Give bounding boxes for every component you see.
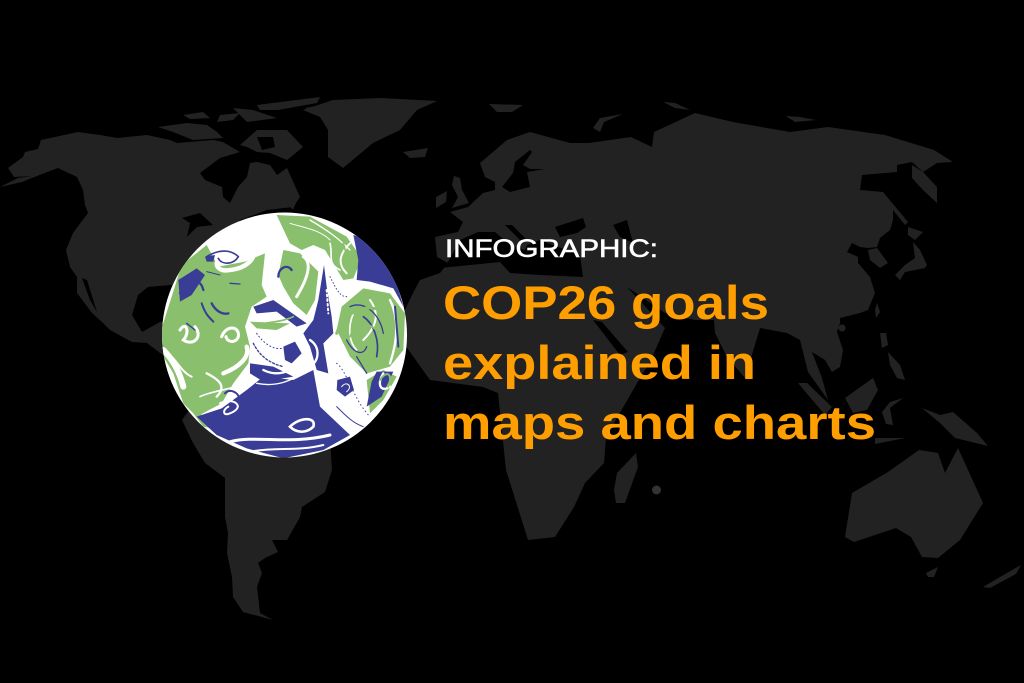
title [443, 276, 876, 449]
Indonesia and New Guinea [798, 383, 832, 415]
Canadian Arctic islands [158, 97, 330, 210]
Reunion dot [652, 486, 661, 494]
world map background [0, 97, 1021, 620]
globe blue oceans [178, 235, 403, 458]
title: maps and charts [443, 396, 876, 449]
title: explained in [443, 336, 756, 389]
heading block [443, 235, 876, 449]
Kamchatka Korea and East Asian islands [912, 165, 937, 203]
Gulf of California [82, 278, 97, 312]
Tasmania [926, 567, 938, 577]
globe green land masses [160, 215, 405, 430]
kicker: INFOGRAPHIC: INFOGRAPHIC: [445, 235, 658, 263]
United Kingdom and Ireland [452, 176, 469, 208]
Arctic Ocean islands of Eurasia [489, 104, 523, 112]
Gulf of Mexico [132, 285, 185, 332]
South America [182, 395, 332, 620]
globe icon [160, 212, 408, 458]
globe cloud and current swirls [163, 220, 396, 452]
title: COP26 goals [443, 276, 769, 329]
Great Lakes [182, 213, 213, 237]
Australia [845, 448, 983, 558]
New Zealand [983, 565, 1021, 588]
North and Central America [0, 132, 300, 375]
Iceland [403, 148, 428, 158]
inland seas [440, 150, 633, 355]
Madagascar [614, 453, 638, 503]
Eurasia and Africa [405, 113, 953, 540]
Greenland [303, 98, 437, 168]
